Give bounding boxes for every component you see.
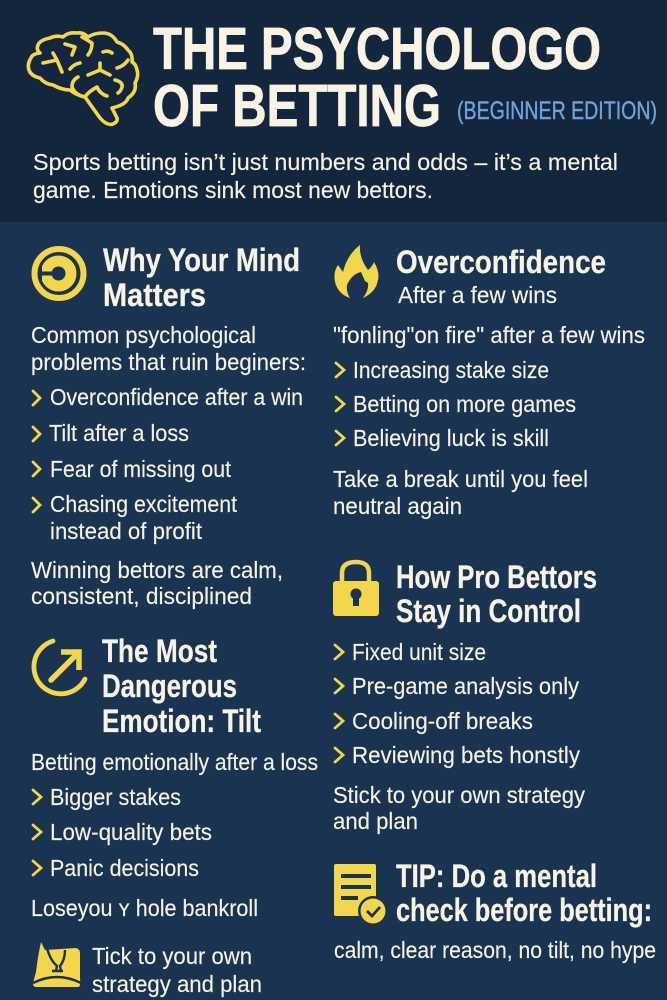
intro text bbox=[31, 322, 306, 375]
closing text bbox=[333, 782, 585, 834]
closing text: Loseyou ʏ hole bankroll bbox=[31, 895, 258, 921]
icon: yellow badge bbox=[33, 942, 81, 987]
bullet list: instead of profit bbox=[50, 518, 203, 544]
icon: flame bbox=[334, 245, 378, 298]
icon: circular arrow bbox=[34, 641, 85, 694]
bullet list: Fear of missing out bbox=[50, 456, 232, 482]
heading: Emotion: Tilt bbox=[102, 703, 261, 739]
bullet list bbox=[33, 384, 303, 544]
title bbox=[153, 16, 601, 139]
callout text: Tick to your own bbox=[92, 943, 252, 969]
intro text bbox=[33, 149, 618, 203]
bullet list bbox=[33, 784, 212, 881]
heading: Matters bbox=[103, 277, 206, 313]
subheading: After a few wins bbox=[398, 282, 557, 308]
heading bbox=[103, 242, 300, 313]
heading bbox=[102, 633, 261, 739]
bullet list: Reviewing bets honstly bbox=[352, 742, 580, 768]
bullet list: Believing luck is skill bbox=[353, 425, 549, 451]
panel: the most dangerous emotion bbox=[31, 633, 318, 997]
heading: TIP: Do a mental bbox=[396, 858, 597, 894]
panel: how pro bettors stay in control bbox=[333, 559, 597, 834]
closing text: neutral again bbox=[333, 493, 462, 519]
bullet list bbox=[335, 639, 580, 768]
heading bbox=[396, 858, 652, 928]
bullet list: Betting on more games bbox=[353, 391, 576, 417]
heading bbox=[396, 559, 597, 629]
definition text: Betting emotionally after a loss bbox=[31, 749, 318, 775]
panel: overconfidence bbox=[333, 244, 645, 519]
intro text: game. Emotions sink most new bettors. bbox=[33, 177, 433, 203]
intro text: problems that ruin beginers: bbox=[31, 349, 306, 375]
bullet list: Cooling-off breaks bbox=[352, 708, 533, 734]
closing text: consistent, disciplined bbox=[31, 583, 252, 609]
panel: header bbox=[0, 0, 667, 222]
bullet list bbox=[336, 357, 576, 451]
intro text: Common psychological bbox=[31, 322, 256, 348]
bullet list: Increasing stake size bbox=[353, 357, 549, 383]
bullet list: Overconfidence after a win bbox=[50, 384, 303, 410]
bullet list: Tilt after a loss bbox=[49, 420, 189, 446]
bullet list: Low-quality bets bbox=[50, 819, 212, 845]
heading: How Pro Bettors bbox=[396, 559, 597, 595]
callout text bbox=[92, 943, 262, 997]
bullet list: Chasing excitement bbox=[50, 491, 238, 517]
callout text: strategy and plan bbox=[92, 971, 262, 997]
icon: brain bbox=[28, 33, 138, 124]
title: OF BETTING bbox=[153, 73, 441, 139]
bullet list: Fixed unit size bbox=[352, 639, 486, 665]
icon: checklist bbox=[334, 864, 388, 926]
panel: tip bbox=[334, 858, 656, 963]
bullet list: Pre-game analysis only bbox=[352, 673, 579, 699]
bullet list: Bigger stakes bbox=[50, 784, 181, 810]
closing text bbox=[31, 557, 283, 609]
closing text: Winning bettors are calm, bbox=[31, 557, 283, 583]
closing text: Take a break until you feel bbox=[333, 466, 588, 492]
icon: padlock bbox=[333, 562, 379, 616]
bullet list: Panic decisions bbox=[50, 855, 199, 881]
intro text: Sports betting isn’t just numbers and odds – it’s a mental bbox=[33, 149, 618, 175]
closing text: Stick to your own strategy bbox=[333, 782, 585, 808]
heading: Stay in Control bbox=[396, 593, 581, 629]
panel: why your mind matters bbox=[31, 242, 306, 609]
icon: circular target bbox=[34, 249, 84, 298]
closing text bbox=[333, 466, 588, 519]
heading: Why Your Mind bbox=[103, 242, 300, 278]
heading: Overconfidence bbox=[396, 244, 606, 280]
closing text: and plan bbox=[333, 808, 418, 834]
heading: Dangerous bbox=[102, 668, 237, 704]
heading: The Most bbox=[102, 633, 217, 669]
definition text: "fonling"on fire" after a few wins bbox=[333, 322, 645, 348]
